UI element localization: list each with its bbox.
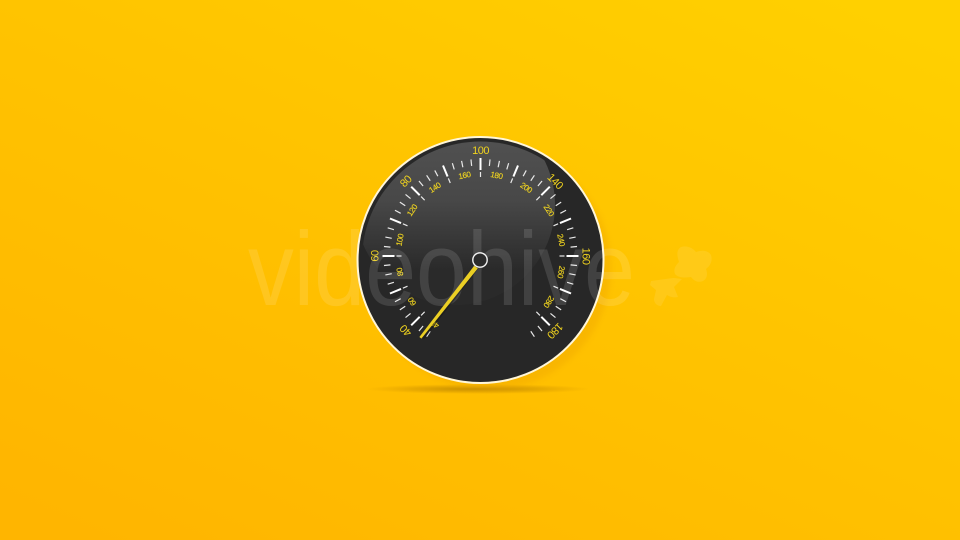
watermark wordmark: videohive: [248, 211, 635, 328]
inner scale numbers: 80: [395, 266, 405, 277]
inner scale numbers: 240: [555, 233, 567, 248]
watermark logo: [650, 246, 712, 306]
outer scale numbers: 40: [398, 322, 414, 338]
outer scale numbers: [370, 145, 592, 341]
inner scale numbers: 160: [458, 170, 472, 181]
inner scale numbers: 280: [541, 294, 556, 310]
gauge face gloss: [363, 142, 555, 258]
outer scale numbers: 180: [544, 320, 565, 341]
inner scale numbers: 220: [542, 203, 556, 219]
speedometer gauge: [248, 136, 631, 384]
inner scale numbers: 60: [406, 295, 418, 307]
dial offset shadow: [367, 146, 611, 390]
inner scale numbers: 100: [394, 232, 406, 247]
inner scale numbers: 200: [519, 181, 534, 195]
inner ticks: [396, 172, 564, 315]
inner scale numbers: 140: [427, 180, 443, 195]
inner scale numbers: 120: [405, 202, 420, 218]
major ticks: [382, 158, 578, 325]
outer scale numbers: 60: [370, 250, 382, 262]
minor ticks: [384, 159, 577, 337]
outer scale numbers: 80: [398, 173, 415, 190]
tick marks: [382, 158, 578, 337]
needle: [419, 265, 478, 339]
outer scale numbers: 140: [545, 172, 565, 192]
inner scale numbers: [394, 170, 567, 330]
inner scale numbers: 180: [490, 170, 504, 181]
outer scale numbers: 100: [472, 145, 489, 157]
needle hub: [473, 253, 487, 267]
outer scale numbers: 160: [580, 248, 592, 265]
ground shadow: [366, 384, 590, 394]
inner scale numbers: 40: [428, 318, 441, 330]
inner scale numbers: 260: [555, 265, 567, 280]
gauge rim: [358, 137, 604, 383]
